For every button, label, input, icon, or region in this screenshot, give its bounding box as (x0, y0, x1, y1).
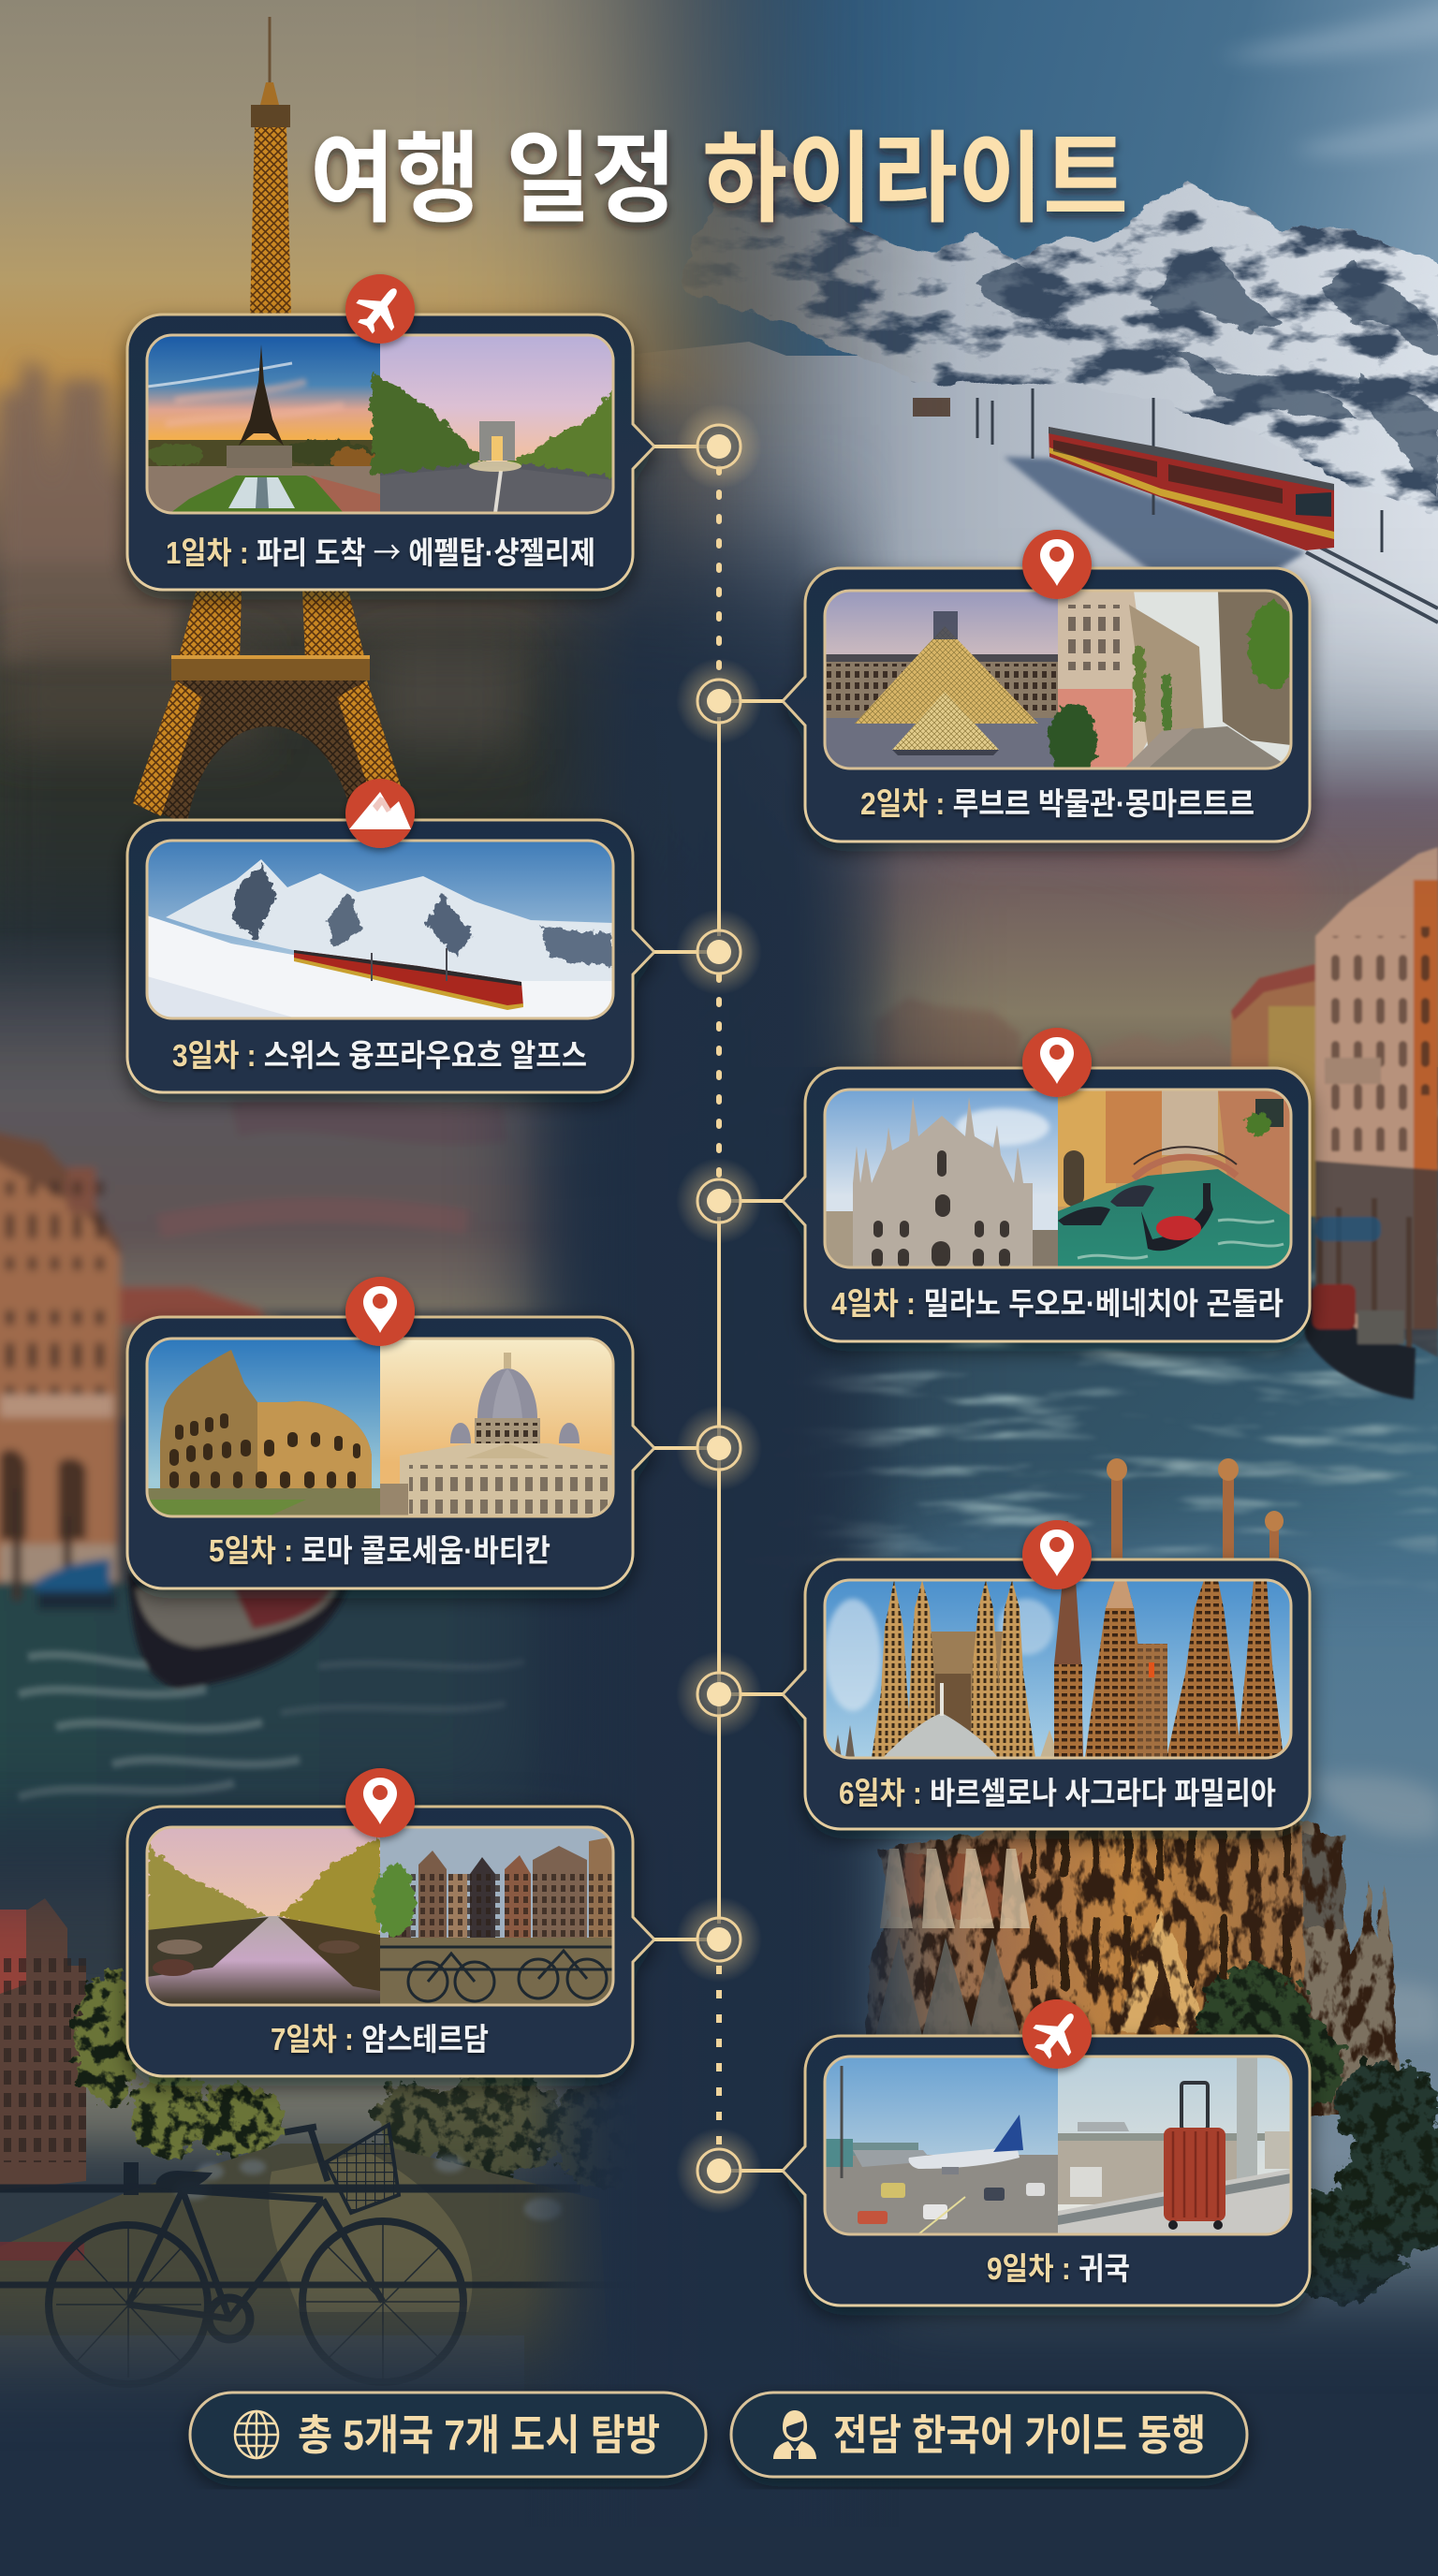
card: day 5 rome (127, 1277, 719, 1588)
caption: day 7: 7일차 : 암스테르담 (271, 2022, 489, 2056)
timeline node: day 7 (676, 1896, 762, 1983)
title: 여행 일정 하이라이트 (310, 124, 1128, 235)
caption: day 3: 3일차 : 스위스 융프라우요흐 알프스 (172, 1038, 587, 1073)
background: bicycle and railing (0, 2125, 646, 2384)
timeline node: day 3 (676, 909, 762, 995)
pill: total countries and cities (190, 2393, 706, 2477)
timeline node: day 2 (676, 658, 762, 744)
badge: plane icon (345, 274, 415, 344)
caption: day 6: 6일차 : 바르셀로나 사그라다 파밀리아 (839, 1776, 1276, 1810)
timeline node: day 5 (676, 1405, 762, 1491)
badge: location pin (345, 1768, 415, 1837)
caption: day 5: 5일차 : 로마 콜로세움·바티칸 (209, 1533, 550, 1568)
photos: amsterdam canals (147, 1827, 613, 2005)
badge: mountain icon (345, 779, 415, 848)
timeline node: day 4 (676, 1158, 762, 1244)
pill: korean guide (731, 2393, 1247, 2477)
photos: eiffel tower and champs-elysees (147, 335, 620, 513)
photos: colosseum and vatican (147, 1339, 613, 1516)
background: venice scene left side (0, 958, 571, 1826)
card: day 7 amsterdam (127, 1768, 719, 2076)
background: paris sunset scene with eiffel tower (0, 0, 817, 957)
card: day 2 louvre (719, 530, 1310, 842)
card: day 4 milan venice (719, 1028, 1310, 1341)
background: eiffel tower (133, 17, 406, 824)
photos: louvre pyramid and montmartre (825, 591, 1297, 778)
timeline node: day 1 (676, 403, 762, 490)
photo: jungfrau alps and train (147, 841, 613, 1018)
card: day 3 jungfrau (127, 779, 719, 1092)
background: venice scene right side (820, 731, 1438, 1597)
photos: airport and suitcase (825, 2056, 1291, 2234)
badge: location pin (1022, 1520, 1092, 1589)
caption: day 2: 2일차 : 루브르 박물관·몽마르트르 (860, 786, 1255, 821)
timeline spine (716, 468, 722, 2158)
text: korean guide: 전담 한국어 가이드 동행 (833, 2411, 1206, 2459)
badge: location pin (345, 1277, 415, 1346)
background: amsterdam canal scene (0, 1685, 936, 2527)
timeline node: day 9 (676, 2128, 762, 2214)
icon: guide person (773, 2410, 816, 2459)
badge: location pin (1022, 1028, 1092, 1097)
card: day 6 barcelona (719, 1520, 1310, 1829)
caption: day 4: 4일차 : 밀라노 두오모·베네치아 곤돌라 (831, 1286, 1284, 1321)
badge: location pin (1022, 530, 1092, 599)
timeline node: day 6 (676, 1651, 762, 1737)
background: central navy band (524, 281, 899, 2527)
card: day 9 return home (719, 1999, 1310, 2305)
icon: globe (235, 2411, 278, 2458)
background: sagrada familia scene (562, 1310, 1438, 2434)
text: total countries: 총 5개국 7개 도시 탐방 (298, 2411, 660, 2459)
card: day 1 paris (127, 274, 719, 590)
background: sagrada spires above card (1060, 1458, 1284, 1563)
background: swiss alps scene with train (650, 0, 1438, 865)
caption: day 1: 1일차 : 파리 도착 → 에펠탑·샹젤리제 (166, 528, 595, 573)
badge: plane icon (1022, 1999, 1092, 2069)
caption: day 9: 9일차 : 귀국 (987, 2251, 1130, 2286)
photos: sagrada familia (825, 1580, 1291, 1758)
photos: milan duomo and venice canal (825, 1090, 1291, 1267)
